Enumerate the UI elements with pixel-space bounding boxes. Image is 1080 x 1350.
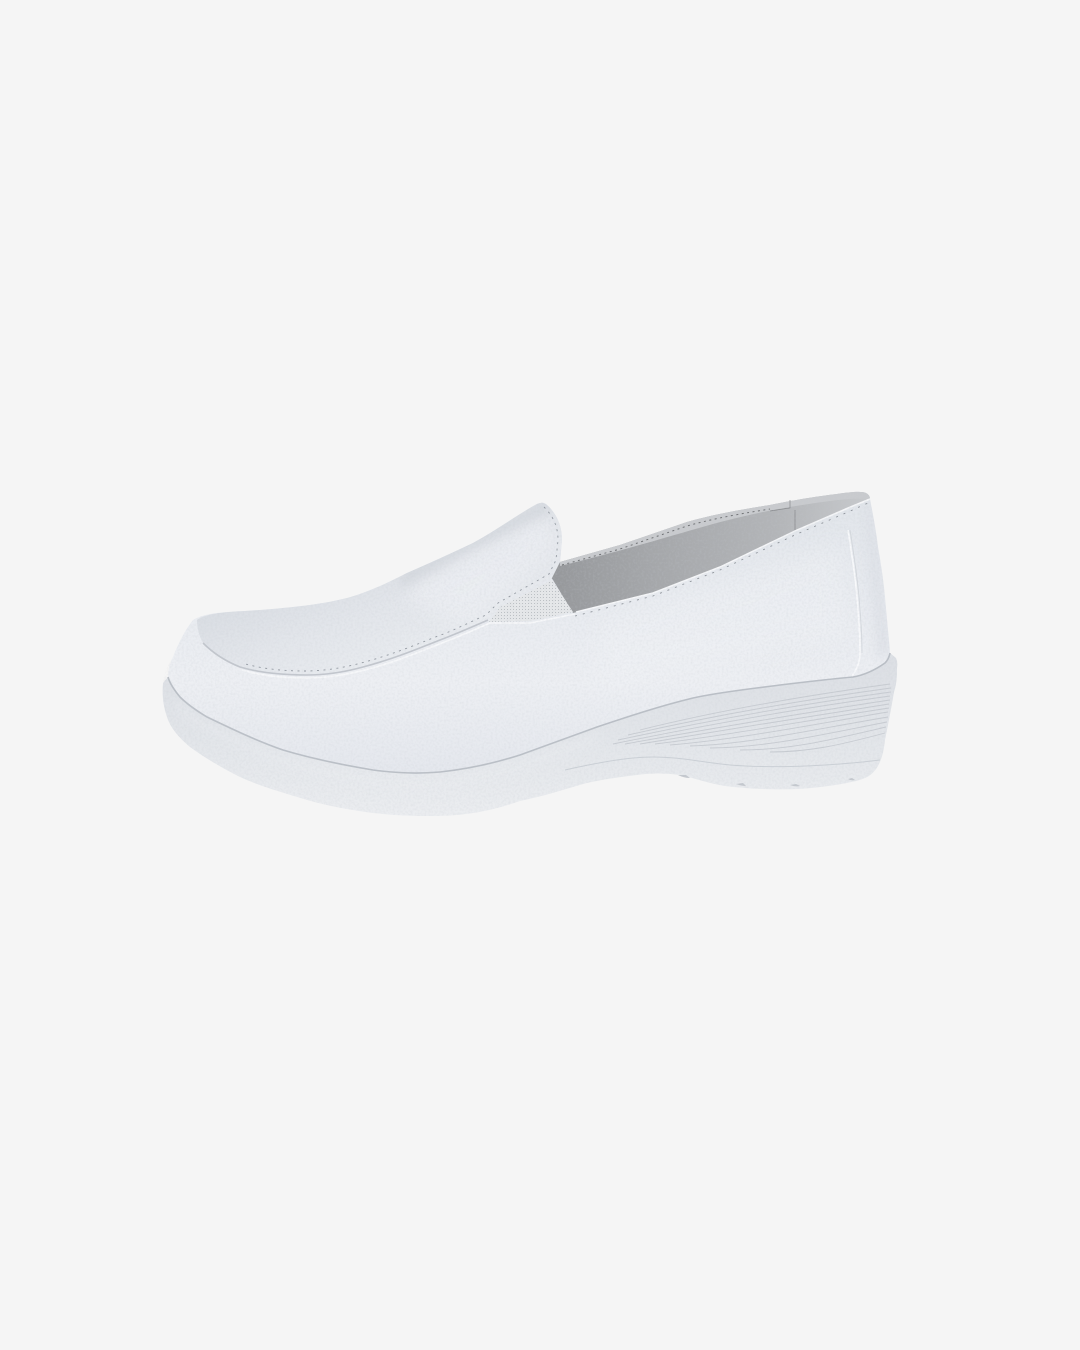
product photo: white slip-on wedge shoe xyxy=(162,492,898,816)
collar lining xyxy=(550,492,870,613)
upper rim stitching and heel seam xyxy=(575,499,870,676)
lower sole contour xyxy=(565,757,880,770)
soft shading on quarter and heel xyxy=(878,617,888,652)
sole shape xyxy=(163,653,897,816)
sole seam line xyxy=(168,653,890,784)
wedge heel ribbing xyxy=(613,684,891,752)
vamp panel xyxy=(197,500,575,678)
upper body shape xyxy=(168,492,890,773)
tread notches xyxy=(678,775,855,786)
elastic gusset xyxy=(489,580,573,622)
vamp stitching xyxy=(242,507,558,671)
leather grain overlay xyxy=(176,506,870,802)
